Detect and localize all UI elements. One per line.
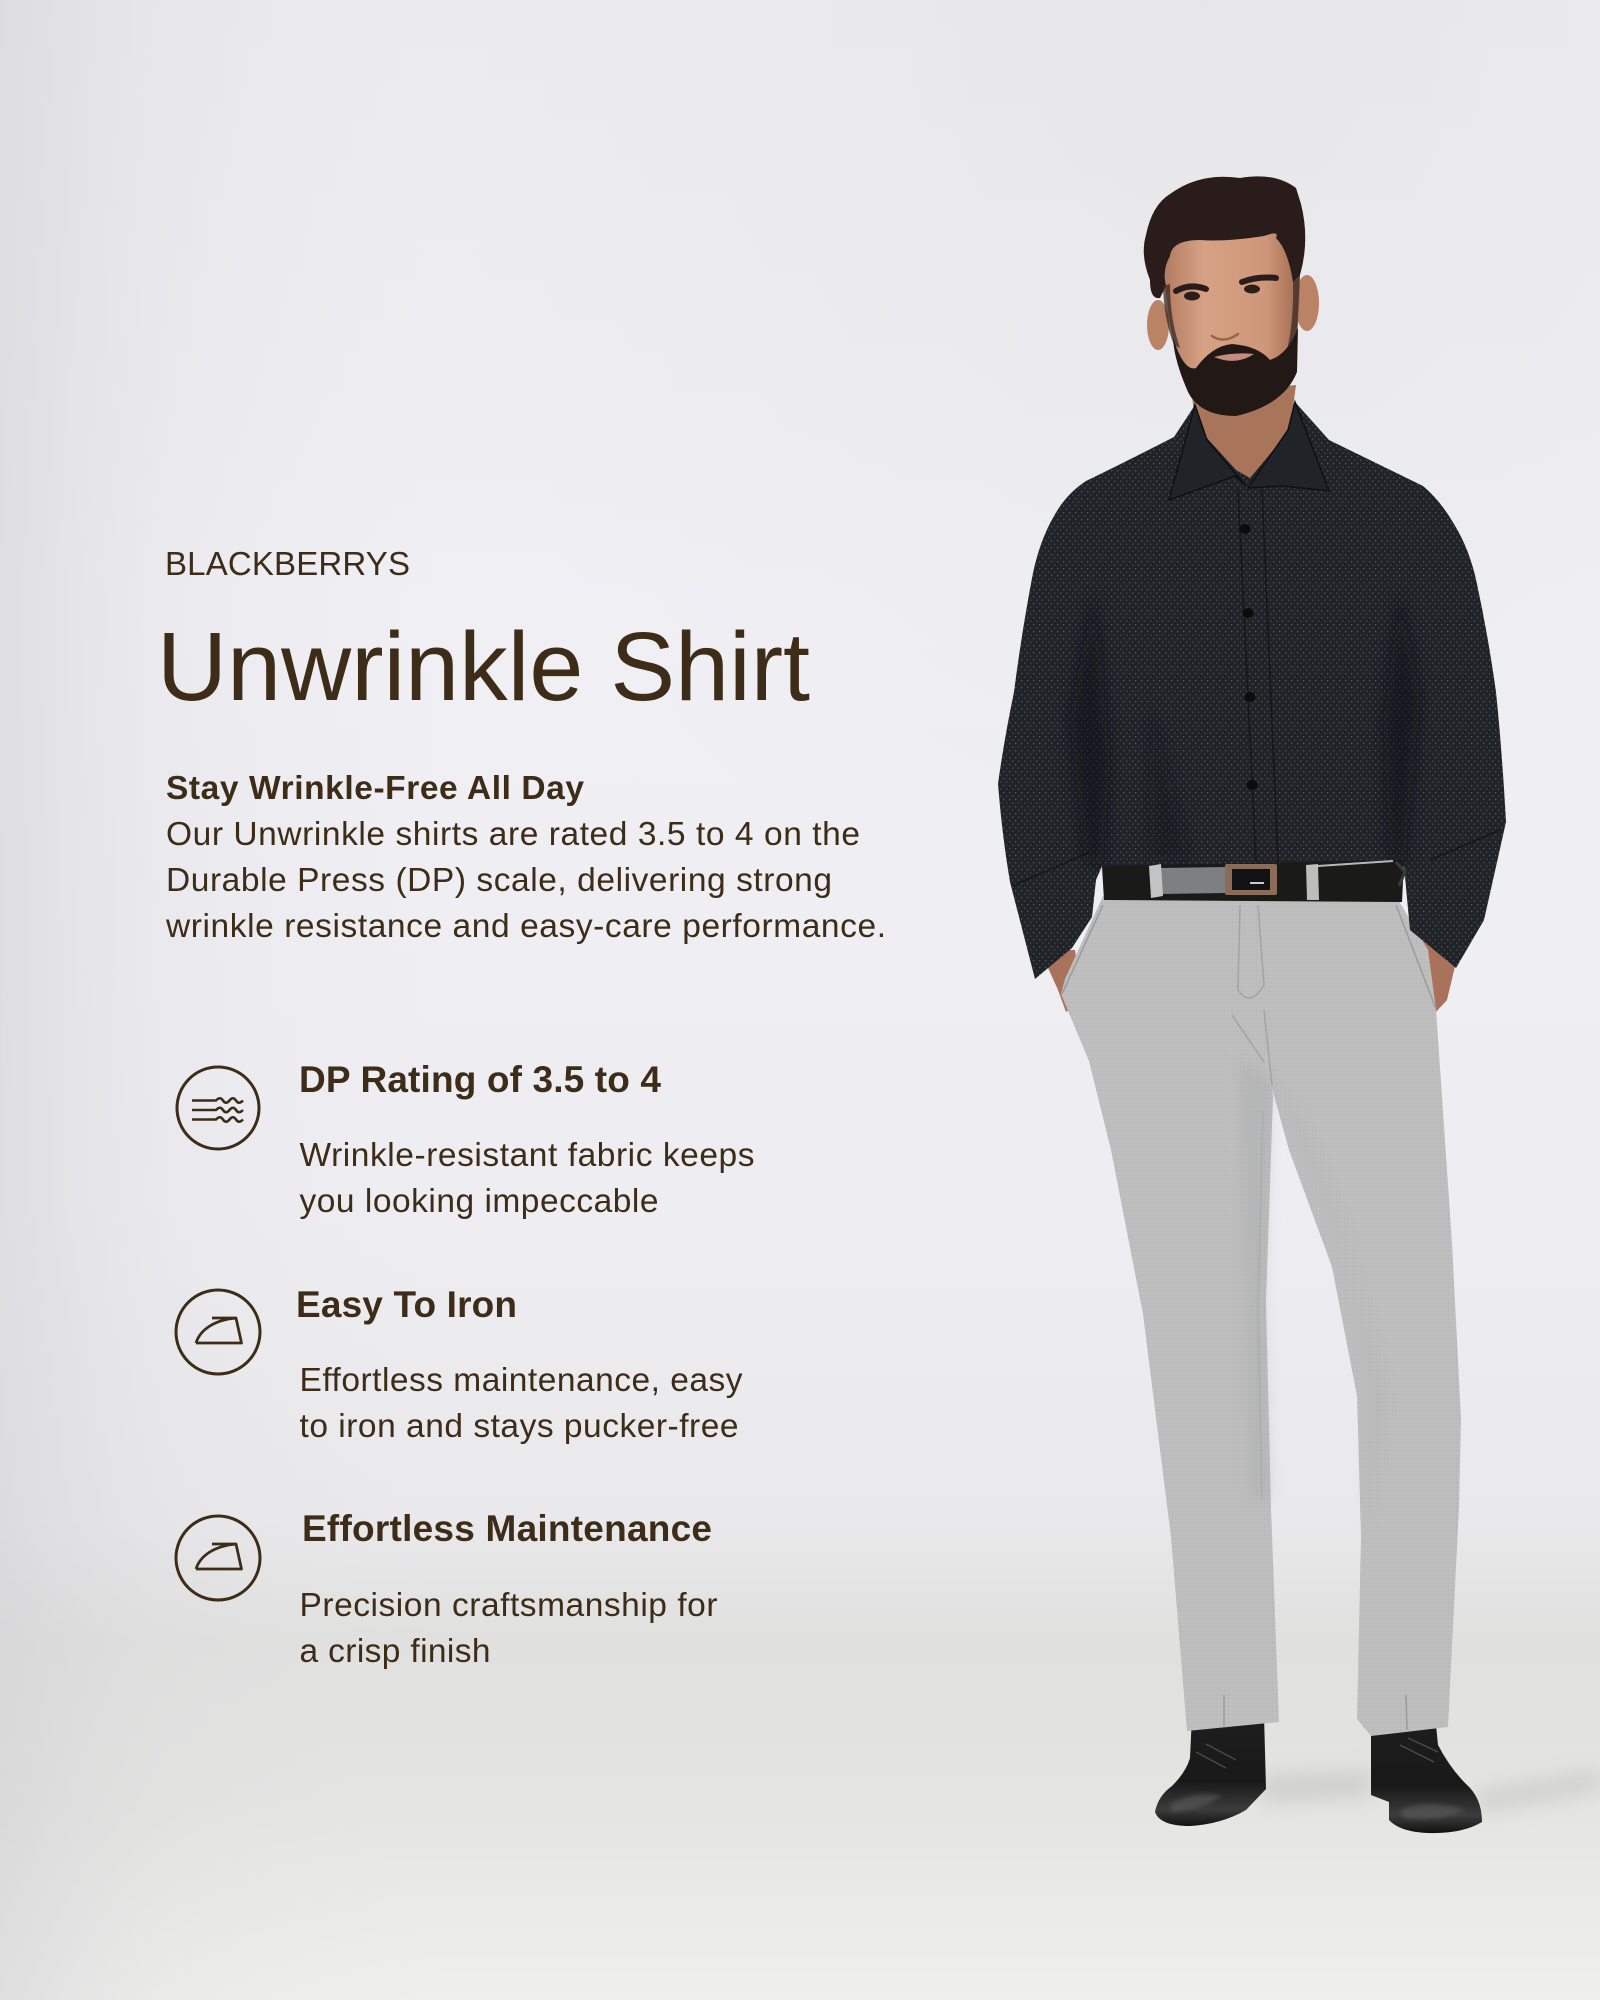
face	[1163, 215, 1300, 415]
feature description: Effortless maintenance, easy	[300, 1362, 743, 1399]
feature heading: DP Rating of 3.5 to 4	[299, 1059, 661, 1100]
feature heading: Easy To Iron	[296, 1284, 517, 1325]
hair	[1144, 176, 1305, 298]
belt buckle	[1225, 864, 1277, 895]
shirt	[998, 402, 1506, 979]
feature: DP rating	[177, 1059, 754, 1220]
feature description: Precision craftsmanship for	[300, 1587, 718, 1624]
shirt buttons	[1240, 524, 1258, 790]
beard	[1173, 328, 1298, 416]
feature description	[300, 1587, 718, 1670]
eyes and brows	[1176, 278, 1276, 300]
floor shadows	[1262, 1770, 1600, 1812]
model photo illustration	[998, 176, 1600, 1833]
neck	[1192, 385, 1296, 478]
nose	[1212, 334, 1238, 340]
intro paragraph: Our Unwrinkle shirts are rated 3.5 to 4 on the	[166, 816, 860, 853]
collar	[1169, 402, 1329, 500]
feature description: to iron and stays pucker-free	[300, 1408, 738, 1445]
feature description	[300, 1137, 754, 1220]
intro text block	[165, 770, 886, 945]
feature heading: Effortless Maintenance	[302, 1508, 712, 1549]
feature: easy to iron	[176, 1284, 743, 1445]
ears	[1147, 275, 1319, 350]
icon: iron	[176, 1516, 260, 1600]
feature description: Wrinkle-resistant fabric keeps	[300, 1137, 754, 1174]
intro heading: Stay Wrinkle-Free All Day	[166, 770, 584, 807]
intro paragraph: Durable Press (DP) scale, delivering strong	[166, 862, 832, 899]
head	[1144, 176, 1319, 416]
trousers	[1061, 896, 1461, 1736]
feature description	[300, 1362, 743, 1445]
hands	[1040, 930, 1456, 1012]
brand name: BLACKBERRYS	[165, 545, 410, 582]
icon: wrinkle-resistant waves	[177, 1067, 259, 1149]
sideburns	[1163, 275, 1300, 350]
intro paragraph	[165, 816, 886, 945]
feature: effortless maintenance	[176, 1508, 718, 1670]
feature description: a crisp finish	[300, 1633, 490, 1670]
mouth	[1214, 353, 1254, 361]
belt	[1102, 860, 1405, 902]
icon: iron	[176, 1290, 260, 1374]
shoes	[1155, 1715, 1482, 1833]
feature description: you looking impeccable	[300, 1183, 658, 1220]
title: Unwrinkle Shirt	[157, 612, 810, 721]
intro paragraph: wrinkle resistance and easy-care performance.	[165, 908, 886, 945]
